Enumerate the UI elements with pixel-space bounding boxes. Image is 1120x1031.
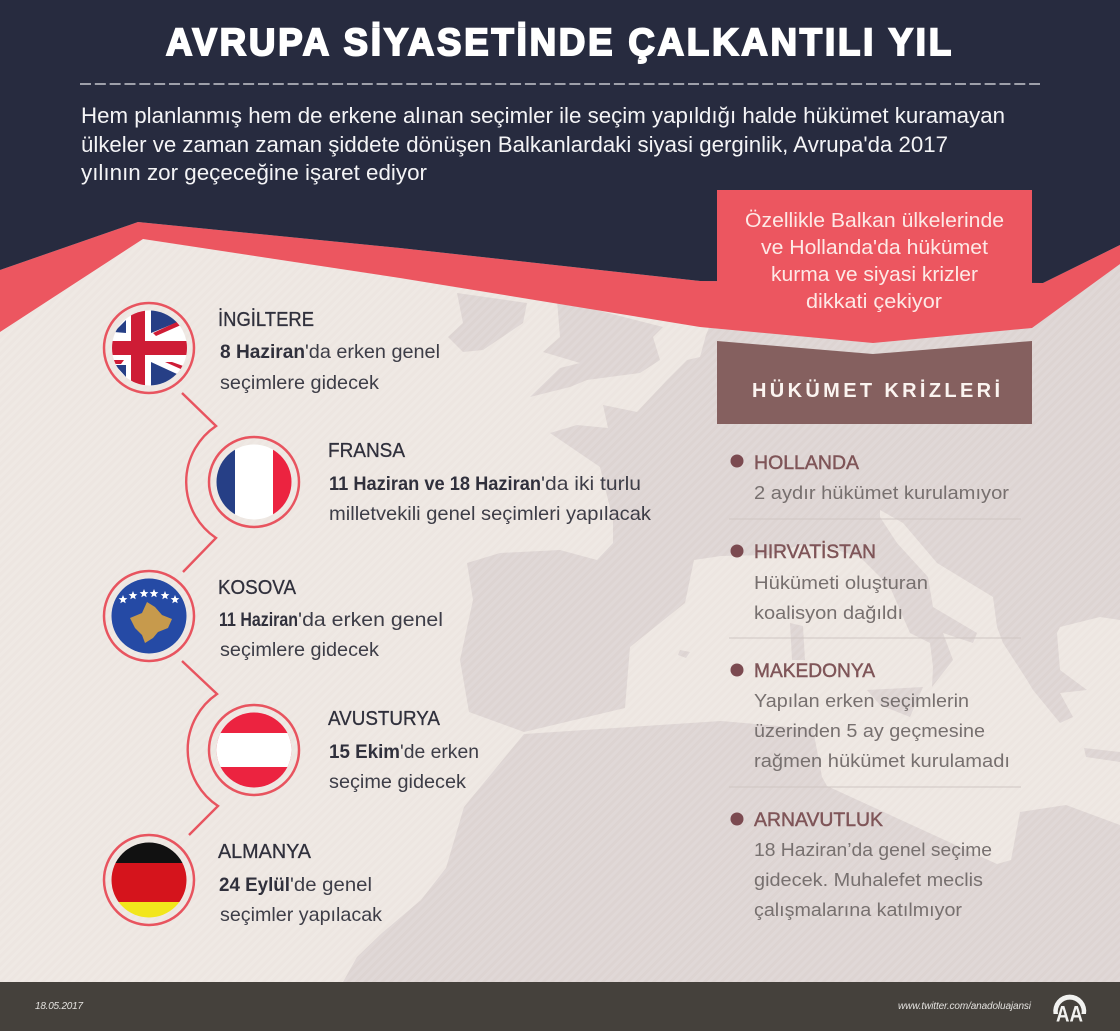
entry: Fransa: 11 Haziran ve 18 Haziran	[329, 473, 541, 495]
intro text: Hem planlanmış hem de erkene alınan seçimler ile seçim yapıldığı halde hükümet kuramayan	[81, 103, 1005, 128]
icon: AA logo: AA	[1056, 1002, 1083, 1026]
flag: Kosovo	[104, 571, 194, 661]
footer bar	[0, 982, 1120, 1031]
title: AVRUPA SİYASETİNDE ÇALKANTILI YIL	[166, 22, 954, 64]
date: 18.05.2017	[35, 1001, 83, 1012]
entry: Avusturya: seçime gidecek	[329, 771, 466, 793]
crisis: Hollanda: HOLLANDA	[754, 453, 859, 474]
red wave band	[0, 222, 1120, 343]
entry: Kosova: seçimlere gidecek	[220, 639, 379, 661]
entry: Almanya: ALMANYA	[218, 841, 312, 863]
navy header background	[0, 0, 1120, 283]
crisis: Arnavutluk: 18 Haziran’da genel seçime	[754, 839, 992, 860]
crisis: Arnavutluk: gidecek. Muhalefet meclis	[754, 869, 983, 890]
crisis: Hollanda	[730, 453, 1009, 503]
intro text: ülkeler ve zaman zaman şiddete dönüşen Balkanlardaki siyasi gerginlik, Avrupa'da 2017	[81, 132, 948, 157]
flag: France	[209, 437, 299, 527]
crisis: Arnavutluk	[730, 810, 992, 920]
intro text: yılının zor geçeceğine işaret ediyor	[81, 160, 427, 185]
crisis: Makedonya	[730, 661, 1010, 771]
entry: Almanya: seçimler yapılacak	[220, 904, 382, 926]
crisis: Arnavutluk: çalışmalarına katılmıyor	[754, 899, 962, 920]
crisis: Hırvatistan: HIRVATİSTAN	[754, 542, 876, 563]
callout: red box: kurma ve siyasi krizler	[771, 263, 978, 286]
callout: red box: Özellikle Balkan ülkelerinde	[745, 209, 1004, 232]
entry: İngiltere: İNGİLTERE	[218, 308, 314, 331]
crisis: Makedonya: üzerinden 5 ay geçmesine	[754, 720, 985, 741]
flag: Austria	[209, 705, 299, 795]
intro text	[81, 103, 1005, 185]
panel heading: hükümet krizleri: HÜKÜMET KRİZLERİ	[752, 379, 1000, 402]
crisis: Hırvatistan: Hükümeti oluşturan	[754, 572, 928, 593]
crisis: Hırvatistan: koalisyon dağıldı	[754, 602, 903, 623]
entry: İngiltere: 'da erken genel	[305, 341, 440, 363]
crisis: Makedonya: Yapılan erken seçimlerin	[754, 690, 969, 711]
crisis: Arnavutluk: ARNAVUTLUK	[754, 810, 883, 831]
entry: Fransa	[328, 440, 651, 525]
entry: Avusturya: 15 Ekim	[329, 741, 400, 763]
entry: Fransa: milletvekili genel seçimleri yapılacak	[329, 503, 651, 525]
entry: Almanya: 'de genel	[290, 874, 372, 896]
crisis: Makedonya: rağmen hükümet kurulamadı	[754, 750, 1010, 771]
entry: Almanya	[218, 841, 382, 926]
crisis: Makedonya: MAKEDONYA	[754, 661, 875, 682]
crisis: Hollanda: 2 aydır hükümet kurulamıyor	[754, 482, 1009, 503]
entry: Kosova: KOSOVA	[218, 577, 297, 599]
entry: Almanya: 24 Eylül	[219, 874, 290, 896]
map background	[0, 180, 1120, 982]
entry: İngiltere: 8 Haziran	[220, 341, 305, 363]
entry: Avusturya	[328, 708, 479, 793]
panel heading: hükümet krizleri	[717, 341, 1032, 424]
entry: Kosova	[218, 577, 443, 661]
flag: United Kingdom	[104, 300, 194, 395]
twitter address: www.twitter.com/anadoluajansi	[898, 1001, 1032, 1012]
callout: red box: ve Hollanda'da hükümet	[761, 236, 988, 259]
flag: Germany	[104, 835, 194, 925]
entry: Avusturya: AVUSTURYA	[328, 708, 441, 730]
callout: red box	[717, 190, 1032, 328]
entry: Fransa: 'da iki turlu	[541, 473, 641, 495]
entry: Kosova: 'da erken genel	[298, 609, 443, 631]
callout: red box: dikkati çekiyor	[806, 290, 942, 313]
entry: Avusturya: 'de erken	[400, 741, 479, 763]
entry: İngiltere: seçimlere gidecek	[220, 372, 379, 394]
icon: AA logo	[1053, 995, 1086, 1026]
crisis: Hırvatistan	[730, 542, 928, 623]
entry: Fransa: FRANSA	[328, 440, 406, 462]
entry: Kosova: 11 Haziran	[219, 609, 298, 631]
entry: İngiltere	[218, 308, 440, 394]
connector lines	[182, 393, 218, 835]
